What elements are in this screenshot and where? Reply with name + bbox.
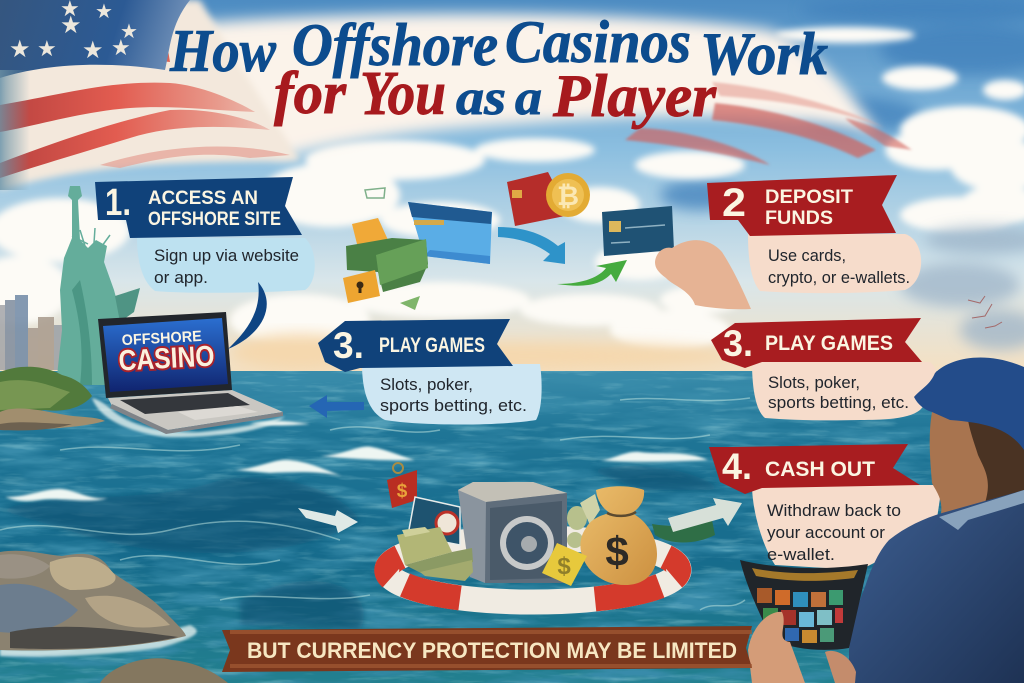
stars: ★	[95, 1, 113, 23]
description panel	[748, 234, 921, 293]
step 4: cash out: CASH OUT	[765, 458, 875, 481]
icon: green curved arrow	[557, 260, 627, 286]
title	[169, 9, 828, 129]
title banner swoosh	[170, 14, 880, 158]
description panel	[362, 364, 542, 424]
floating arrow right	[652, 498, 742, 542]
title: You	[360, 60, 446, 128]
hand holding tablet	[748, 612, 856, 683]
step 4: cash out	[709, 444, 942, 570]
wave crests	[0, 398, 750, 657]
icon: padlock folder	[343, 270, 380, 303]
stars	[9, 0, 138, 64]
title: a	[515, 69, 542, 125]
arrow: step 1 to laptop	[228, 282, 267, 349]
foam around laptop	[92, 398, 285, 437]
title: Player	[552, 63, 717, 129]
american flag	[0, 0, 300, 190]
title: Casinos	[505, 9, 691, 75]
icon: gold note: $	[557, 553, 571, 580]
distant birds	[968, 296, 1002, 328]
small rock	[100, 658, 228, 683]
stars: ★	[120, 21, 138, 43]
step 4: cash out: 4.	[722, 446, 752, 487]
icon: small green arrow	[400, 296, 420, 310]
step 4: cash out: e-wallet.	[767, 546, 835, 564]
island with shrubs	[0, 367, 105, 430]
title: Offshore	[292, 12, 498, 78]
step 3 right: play games: sports betting, etc.	[768, 394, 909, 412]
icon: navy card	[602, 206, 674, 256]
step 3 right: play games: 3.	[723, 323, 753, 364]
sea	[0, 371, 1024, 683]
title: How	[169, 18, 277, 84]
clouds	[0, 27, 1024, 370]
step 2: deposit funds: Use cards,	[768, 247, 846, 265]
title: as	[456, 69, 506, 125]
icon: money bag	[580, 486, 657, 585]
flag right tail	[625, 82, 912, 165]
stars: ★	[82, 37, 104, 64]
rocks bottom left	[0, 551, 186, 650]
step 3 right: play games	[711, 318, 937, 420]
player from behind	[849, 357, 1024, 683]
laptop: CASINO	[118, 341, 215, 378]
floating arrow white left	[298, 508, 358, 533]
step 4: cash out: your account or	[767, 524, 886, 542]
step 3 centre: play games	[318, 319, 542, 424]
description panel	[137, 238, 315, 293]
tablet	[740, 560, 868, 650]
icon: bitcoin coin: ₿	[557, 181, 579, 211]
step 1: access an offshore site: or app.	[154, 269, 208, 287]
icon: small pennant	[365, 188, 385, 198]
step 3 right: play games: PLAY GAMES	[765, 332, 893, 355]
icon: blue card	[408, 202, 492, 264]
lifebuoy with valuables	[387, 463, 679, 602]
hair	[968, 420, 1024, 503]
face and neck	[930, 409, 1000, 518]
ribbon	[707, 175, 897, 236]
icon: red cards	[507, 172, 570, 226]
step 1: access an offshore site: 1.	[105, 182, 131, 224]
step 3 centre: play games: sports betting, etc.	[380, 397, 527, 415]
stars: ★	[60, 12, 82, 39]
stars: ★	[37, 36, 57, 61]
stars: ★	[111, 35, 131, 60]
step 1: access an offshore site	[95, 177, 315, 293]
ribbon	[711, 318, 922, 368]
title: Work	[700, 21, 828, 87]
step 3 centre: play games: Slots, poker,	[380, 376, 473, 394]
icon: tag: $	[397, 481, 408, 502]
shirt	[849, 490, 1024, 683]
hand holding card	[655, 240, 751, 309]
step 1: access an offshore site: Sign up via website	[154, 247, 299, 265]
title: for	[274, 60, 347, 126]
icon: money stack	[397, 527, 473, 581]
laptop	[98, 312, 283, 434]
stars: ★	[9, 36, 31, 63]
step 1: access an offshore site: OFFSHORE SITE	[148, 209, 281, 230]
cap	[914, 357, 1024, 450]
description panel	[752, 485, 942, 570]
step 3 centre: play games: PLAY GAMES	[379, 334, 485, 357]
step 4: cash out: Withdraw back to	[767, 502, 901, 520]
ring	[387, 538, 679, 602]
deep sky patches	[660, 0, 1024, 210]
step 1: access an offshore site: ACCESS AN	[148, 188, 258, 209]
icon: card with no sign	[408, 497, 460, 545]
icon: gold document	[352, 218, 388, 248]
statue of liberty	[56, 186, 140, 385]
step 3 centre: play games: 3.	[333, 325, 364, 366]
icon: bitcoin coin	[546, 173, 590, 217]
icon: green cash	[346, 238, 428, 292]
icon: blue curved arrow	[498, 227, 565, 264]
step 2: deposit funds	[707, 175, 921, 293]
bottom banner: BUT CURRENCY PROTECTION MAY BE LIMITED	[247, 638, 737, 663]
bottom banner	[222, 626, 752, 672]
icon: safe	[458, 482, 567, 583]
step 2: deposit funds: FUNDS	[765, 208, 833, 229]
arrow: blue pointing left	[309, 395, 364, 418]
step 2: deposit funds: crypto, or e-wallets.	[768, 269, 910, 287]
ribbon	[318, 319, 513, 372]
sky background	[0, 0, 1024, 375]
icon: money bag: $	[605, 528, 629, 575]
icon: tag	[387, 463, 417, 508]
centre money and cards	[343, 172, 674, 310]
ribbon	[95, 177, 302, 238]
icon: gold note	[542, 543, 587, 586]
description panel	[752, 362, 937, 420]
step 2: deposit funds: 2	[722, 181, 746, 225]
icon: coin money behind bag	[567, 494, 600, 548]
ribbon	[709, 444, 920, 494]
city skyline	[0, 295, 66, 370]
step 3 right: play games: Slots, poker,	[768, 374, 860, 392]
laptop: OFFSHORE	[121, 328, 202, 349]
step 2: deposit funds: DEPOSIT	[765, 187, 853, 208]
